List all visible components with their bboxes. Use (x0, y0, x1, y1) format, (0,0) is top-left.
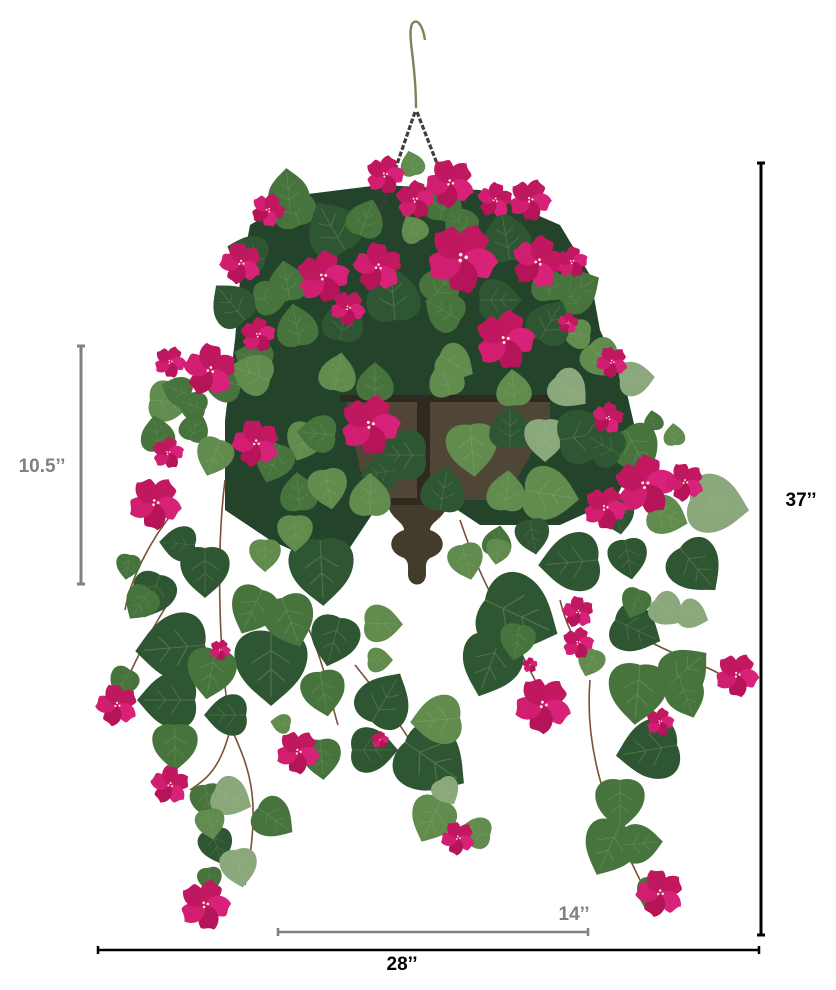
planter finial (388, 505, 447, 584)
hook (410, 22, 425, 108)
label: 14 inches: 14’’ (558, 904, 590, 925)
label: 10.5 inches: 10.5’’ (19, 456, 65, 477)
label: 28 inches: 28’’ (386, 954, 418, 975)
foliage mass behind the planter (225, 185, 640, 570)
dimension: pot width 14 inches (278, 904, 590, 936)
stems (115, 480, 730, 885)
dimension: total height 37 inches (757, 163, 816, 935)
flowers (86, 146, 769, 941)
canopy leaves (137, 148, 754, 542)
trailing leaves (102, 478, 744, 913)
planter (340, 395, 550, 584)
chains (376, 112, 438, 225)
dimension: pot height 10.5 inches (19, 346, 85, 584)
label: 37 inches: 37’’ (786, 490, 816, 511)
dimension: total width 28 inches (98, 946, 759, 975)
